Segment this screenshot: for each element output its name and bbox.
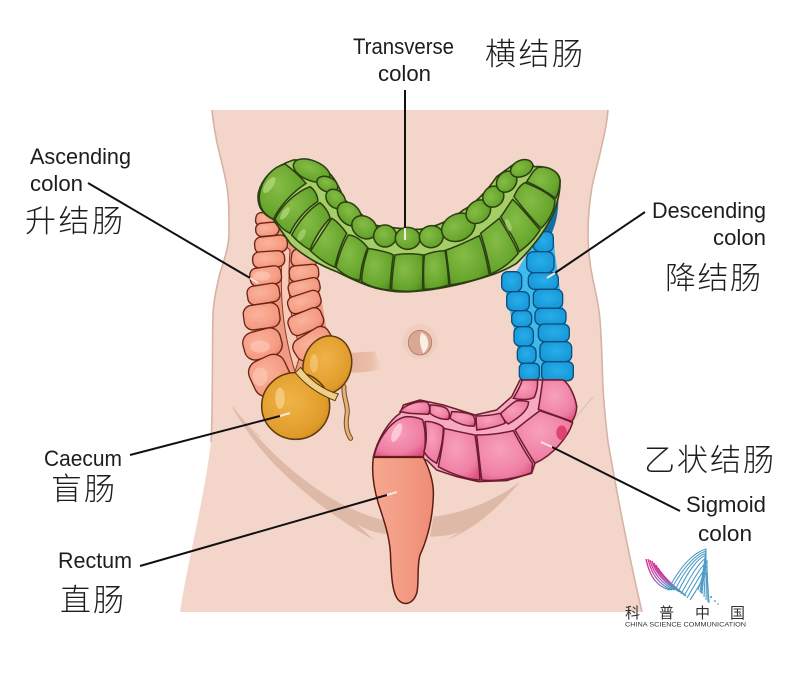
label: transverse colon: colon bbox=[378, 61, 431, 86]
logo: China Science Communication bbox=[625, 549, 746, 628]
label: transverse colon: 横结肠 bbox=[485, 37, 583, 72]
label: transverse colon: Transverse bbox=[353, 34, 454, 59]
label: sigmoid colon: 乙状结肠 bbox=[644, 443, 774, 478]
caecum bbox=[262, 330, 358, 439]
tube behind the caecum bbox=[348, 352, 382, 373]
label: ascending colon bbox=[25, 144, 131, 239]
label: sigmoid colon bbox=[644, 443, 774, 546]
logo: China Science Communication: CHINA SCIENCE COMMUNICATION bbox=[625, 622, 746, 628]
label: descending colon bbox=[652, 198, 766, 296]
leader line: sigmoid colon bbox=[541, 442, 680, 511]
leader line: caecum bbox=[130, 413, 290, 455]
descending colon bbox=[502, 200, 573, 381]
navel bbox=[403, 324, 437, 359]
torso bbox=[180, 110, 642, 612]
leader line: transverse colon bbox=[404, 90, 406, 240]
rectum bbox=[373, 457, 433, 603]
pelvic crease shadows bbox=[232, 407, 520, 540]
leader line: rectum bbox=[140, 492, 397, 566]
label: sigmoid colon: Sigmoid bbox=[686, 492, 766, 517]
label: rectum: Rectum bbox=[58, 548, 132, 573]
transverse colon bbox=[258, 154, 560, 292]
ascending colon bbox=[240, 212, 336, 400]
label: caecum: 盲肠 bbox=[51, 472, 115, 507]
label: caecum bbox=[44, 446, 122, 507]
label: rectum bbox=[58, 548, 132, 618]
label: descending colon: 降结肠 bbox=[665, 261, 761, 296]
diagram: colon, drawn in 3x coordinates bbox=[232, 154, 577, 603]
appendix bbox=[344, 387, 351, 438]
label: ascending colon: colon bbox=[30, 171, 83, 196]
sigmoid colon bbox=[373, 380, 577, 482]
label: sigmoid colon: colon bbox=[698, 521, 752, 546]
label: ascending colon: Ascending bbox=[30, 144, 131, 169]
label: caecum: Caecum bbox=[44, 446, 122, 471]
label: descending colon: colon bbox=[713, 225, 766, 250]
label: transverse colon bbox=[353, 34, 583, 86]
label: rectum: 直肠 bbox=[60, 583, 124, 618]
leader line: descending colon bbox=[547, 212, 645, 278]
logo: China Science Communication: 科普中国 bbox=[625, 605, 745, 622]
label: ascending colon: 升结肠 bbox=[25, 204, 123, 239]
label: descending colon: Descending bbox=[652, 198, 766, 223]
leader line: ascending colon bbox=[88, 183, 258, 283]
